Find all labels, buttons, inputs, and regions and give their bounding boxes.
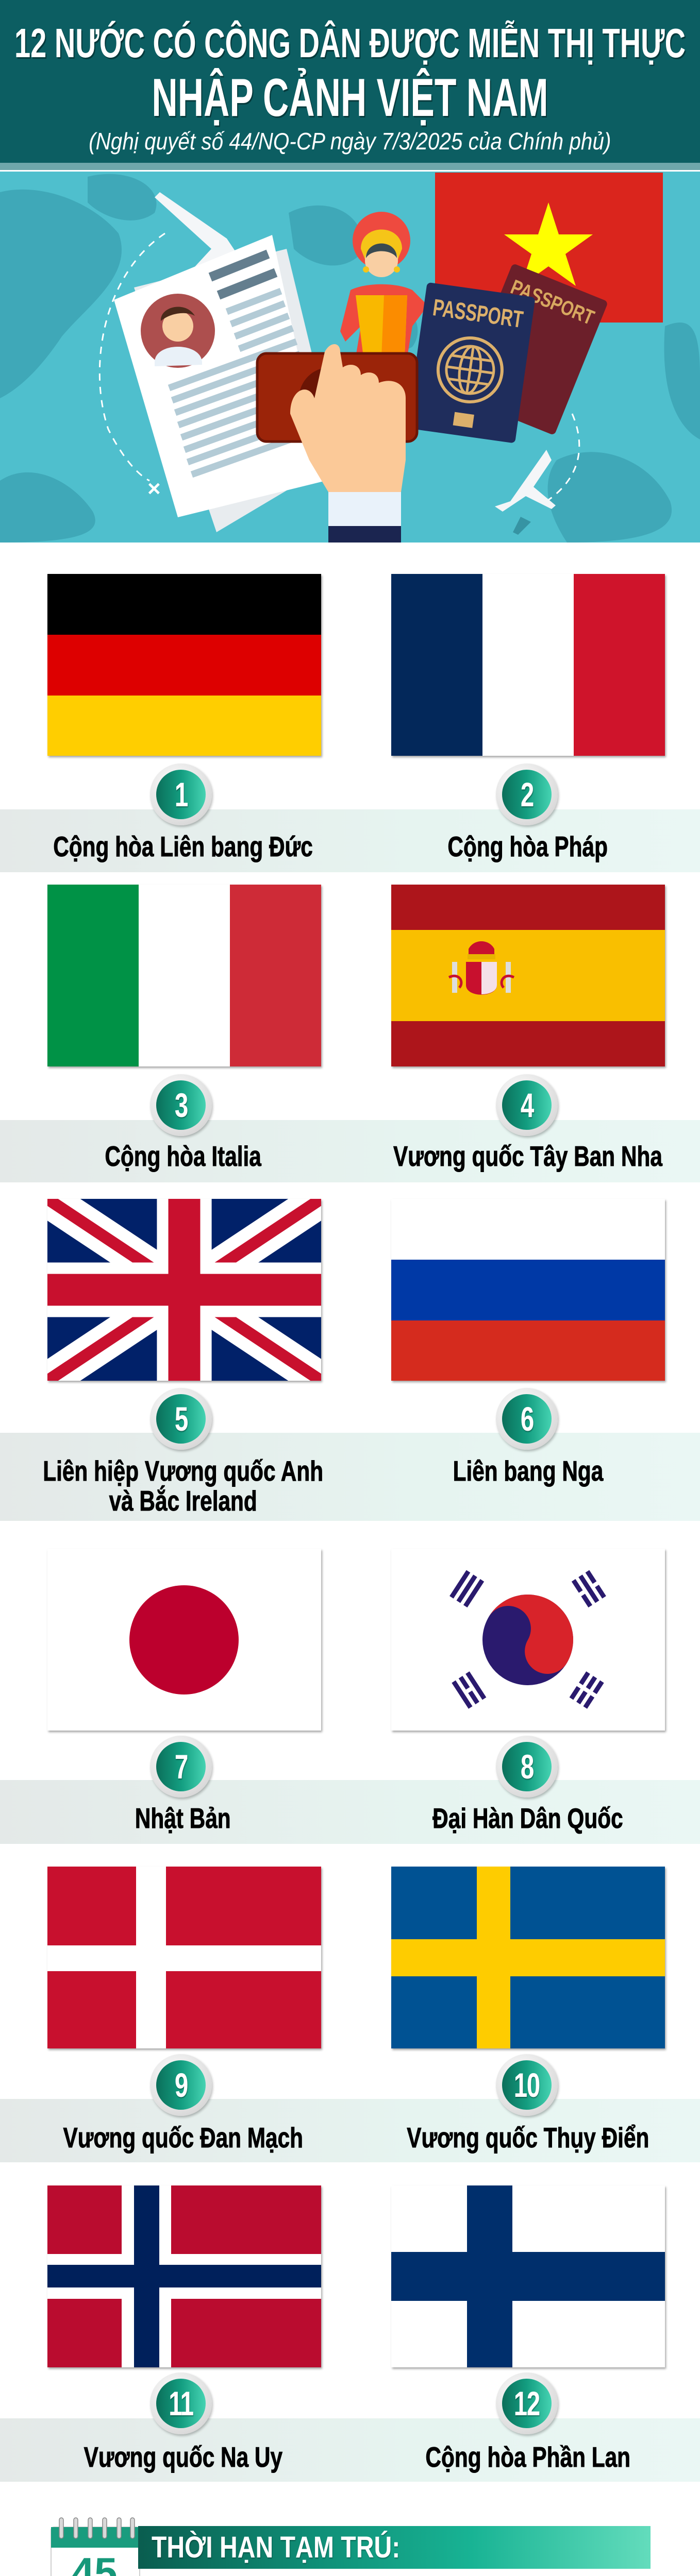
number 2: [496, 764, 558, 825]
number 11: [150, 2372, 212, 2434]
passports: PASSPORT: [431, 294, 525, 333]
number 10: [496, 2054, 558, 2116]
flag: Korea: [391, 1549, 665, 1731]
number 1: 1: [175, 775, 187, 814]
number 4: 4: [521, 1086, 533, 1124]
heading bar: [138, 2526, 651, 2569]
number 12: 12: [514, 2384, 540, 2422]
band row 4: [0, 1780, 700, 1844]
number 9: [150, 2054, 212, 2116]
label 11: Vương quốc Na Uy: [84, 2441, 282, 2473]
label 5: [43, 1455, 323, 1517]
passports: [407, 263, 608, 443]
label 2: Cộng hòa Pháp: [448, 831, 608, 862]
label 3: Cộng hòa Italia: [105, 1140, 261, 1172]
woman in ao dai: [340, 212, 428, 357]
icon: planes: [155, 192, 556, 512]
number 7: [150, 1736, 212, 1798]
number 3: 3: [175, 1086, 187, 1124]
number 11: 11: [169, 2384, 193, 2422]
label 10: Vương quốc Thụy Điển: [407, 2122, 649, 2154]
label 12: Cộng hòa Phần Lan: [425, 2441, 630, 2473]
flag: Finland: [391, 2185, 665, 2367]
label 8: Đại Hàn Dân Quốc: [432, 1802, 623, 1834]
number 4: [496, 1074, 558, 1136]
number 5: 5: [175, 1400, 187, 1438]
band row 6: [0, 2418, 700, 2482]
flag: Japan: [47, 1549, 321, 1731]
title line 2: NHẬP CẢNH VIỆT NAM: [152, 68, 548, 128]
heading bar: THỜI HẠN TẠM TRÚ:: [152, 2531, 400, 2564]
label 4: Vương quốc Tây Ban Nha: [393, 1140, 662, 1172]
number 1: [150, 764, 212, 825]
flag: Spain: [391, 885, 665, 1066]
label 7: Nhật Bản: [135, 1802, 231, 1834]
hero illustration: [0, 172, 700, 543]
number 3: [150, 1074, 212, 1136]
band row 2: [0, 1120, 700, 1182]
hero illustration: ×: [147, 476, 161, 501]
subtitle: (Nghị quyết số 44/NQ-CP ngày 7/3/2025 của Chính phủ): [89, 128, 611, 155]
flag: Italy: [47, 885, 321, 1066]
label 5: và Bắc Ireland: [109, 1485, 257, 1517]
flag: Norway: [47, 2185, 321, 2367]
icon: calendar 45 days: [51, 2517, 140, 2576]
passports: PASSPORT: [508, 276, 597, 329]
number 12: [496, 2372, 558, 2434]
icon: VN flag: [435, 173, 663, 323]
label 6: Liên bang Nga: [453, 1455, 603, 1487]
stamp and hand: [257, 344, 417, 543]
title line 1: 12 NƯỚC CÓ CÔNG DÂN ĐƯỢC MIỄN THỊ THỰC: [14, 20, 686, 66]
number 6: [496, 1388, 558, 1450]
info: temporary stay: [51, 2517, 651, 2576]
label 5: Liên hiệp Vương quốc Anh: [43, 1455, 323, 1487]
flag: Sweden: [391, 1867, 665, 2048]
number 8: [496, 1736, 558, 1798]
number 5: [150, 1388, 212, 1450]
band row 3: [0, 1433, 700, 1521]
label 9: Vương quốc Đan Mạch: [63, 2122, 303, 2154]
number 7: 7: [175, 1748, 187, 1786]
flag: Germany: [47, 574, 321, 756]
header: title block: [0, 0, 700, 170]
band row 5: [0, 2099, 700, 2162]
flag: Denmark: [47, 1867, 321, 2048]
flag: Russia: [391, 1199, 665, 1381]
number 10: 10: [514, 2066, 540, 2104]
document: [114, 235, 338, 532]
flag: France: [391, 574, 665, 756]
number 2: 2: [521, 775, 533, 814]
flag: UK: [47, 1199, 321, 1381]
band row 1: [0, 809, 700, 872]
number 9: 9: [175, 2066, 187, 2104]
label 1: Cộng hòa Liên bang Đức: [53, 831, 313, 862]
dashed route: [99, 233, 165, 481]
number 6: 6: [521, 1400, 533, 1438]
number 8: 8: [521, 1748, 533, 1786]
